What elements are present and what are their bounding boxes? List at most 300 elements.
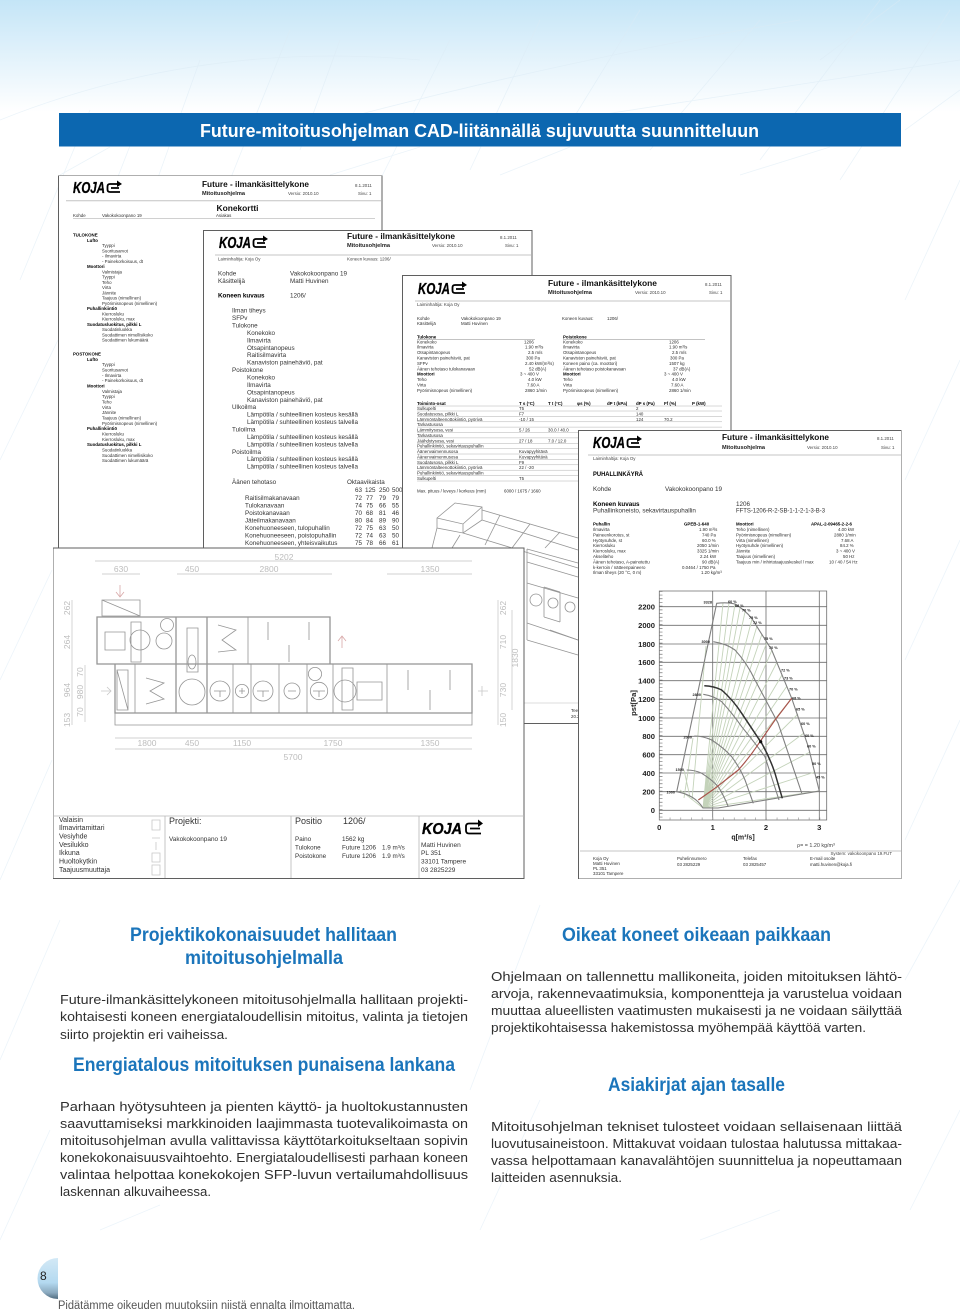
logo: Koja: KOJA — [593, 435, 625, 452]
sound power table: 68 — [366, 510, 374, 517]
motor data: Virta (nimellinen) — [736, 538, 769, 543]
component table: Kuvapyyhitävä — [519, 449, 548, 454]
exhaust unit list: Jännite — [102, 410, 117, 415]
exhaust unit list: Moottori — [87, 384, 105, 388]
sound power table: 66 — [379, 503, 387, 510]
chart efficiency labels: 75 % — [764, 637, 773, 641]
title block position: 1206/ — [343, 816, 366, 826]
exhaust unit list: Suodattimen nimellisikoko — [102, 453, 153, 458]
motor data: Hyötysuhde (nimellinen) — [736, 543, 784, 548]
supply unit data: Tulokone — [417, 334, 437, 339]
sheet header: Mitoitusohjelma — [722, 445, 766, 451]
sheet header: Versio: 2010.10 — [635, 290, 666, 295]
sound power table: Poistokanavaan — [245, 510, 290, 517]
exhaust unit data: 7.60 A — [671, 382, 684, 388]
chart envelope and speed curves — [677, 603, 819, 808]
sound power table: 79 — [379, 495, 387, 502]
component table: F7 — [519, 411, 525, 416]
component table: dP t (kPa) — [607, 401, 628, 406]
motor data: 10 / 40 / 54 Hz — [829, 559, 858, 564]
component table: 7.0 / 12.0 — [548, 438, 567, 443]
title block position: Positio — [295, 816, 322, 826]
sheet header: Vakokokoonpano 19 — [102, 213, 142, 218]
sound power table: 63 — [355, 487, 363, 494]
sheet header: Laiminhaltija: Koja Oy — [417, 302, 460, 307]
chart efficiency labels: 73 % — [784, 676, 793, 680]
supply unit data: SFPv — [417, 361, 429, 366]
CAD dimension labels: 1830 — [510, 648, 520, 667]
project details: Matti Huvinen — [290, 278, 329, 285]
isometric machine sketch: Tee — [571, 708, 579, 713]
component table: 70.2 — [664, 417, 673, 422]
title block project — [169, 816, 228, 843]
supply unit list: Suoritusarvot — [102, 248, 129, 253]
exhaust unit list: Teho — [102, 400, 112, 404]
exhaust unit data: 2.5 m/s — [672, 350, 687, 355]
sheet header: Koneen kuvaus: — [562, 316, 594, 321]
exhaust unit data: Koneen paino (ca. moottori) — [563, 361, 618, 366]
supply unit data: 7.60 A — [527, 382, 540, 388]
machine parameters list: Otsapintanopeus — [247, 389, 295, 396]
component table: 27 / 18 — [519, 438, 533, 443]
supply unit data: 2860 1/min — [525, 388, 547, 393]
component table: Sulkupelti — [417, 406, 436, 411]
logo: Koja — [422, 820, 483, 838]
component table: 124 — [636, 417, 644, 422]
machine parameters list: Lämpötila / suhteellinen kosteus kesällä — [247, 412, 358, 419]
fan data: Äänen tehotaso, A-painotettu — [593, 559, 650, 564]
sheet header: Mitoitusohjelma — [548, 290, 593, 296]
sound power table: 89 — [379, 518, 387, 525]
fan data: GPEB-1-640 — [684, 522, 710, 527]
paragraph — [491, 969, 903, 1035]
sound power table: 70 — [355, 510, 363, 517]
motor data: APAL-2-09465-2-2-6 — [811, 522, 852, 527]
component table: Kuvapyyhitävä — [519, 454, 548, 459]
CAD dimension labels: 1150 — [233, 738, 251, 748]
supply unit list: Kierrosluku, max — [102, 317, 136, 322]
fan data: Ilman tiheys (20 °C, 0 m) — [593, 570, 642, 575]
motor data: 2880 1/min — [834, 532, 856, 537]
sound power table: Tulokanavaan — [245, 503, 285, 510]
text block: right machines in right place — [491, 924, 903, 1035]
title block address: PL 351 — [421, 850, 442, 857]
CAD dimension labels: 262 — [62, 601, 72, 615]
sheet footer: PL 351 — [593, 866, 607, 871]
exhaust unit data: Otsapintanopeus — [563, 350, 597, 355]
sound power table: Raitisilmakanavaan — [245, 495, 300, 502]
panel: fan curve sheet — [578, 430, 902, 879]
CAD dimension lines — [72, 561, 512, 749]
paragraph: laskennan alkuvaiheessa. — [60, 1184, 211, 1199]
supply unit list: Jännite — [102, 290, 117, 295]
component table: Toiminto-osat — [417, 401, 446, 406]
machine parameters list: SFPv — [232, 315, 248, 322]
chart speed labels: 1000 — [667, 790, 675, 794]
logo: Koja: KOJA — [73, 180, 105, 197]
fan data: Kierrosluku, max — [593, 549, 627, 554]
chart efficiency labels: 75 % — [749, 616, 758, 620]
chart efficiency lines — [680, 603, 819, 808]
motor data: 3 ~ 400 V — [836, 549, 855, 554]
chart efficiency labels: 70 % — [789, 688, 798, 692]
paragraph: luovutusaineistoon. Mittakuvat voidaan tulostaa halutussa mittakaa- — [491, 1136, 902, 1151]
chart axis labels: 1800 — [638, 640, 655, 649]
fan data: 1.20 kg/m³ — [701, 570, 722, 575]
motor data: Pyörimisnopeus (nimellinen) — [736, 532, 792, 537]
sheet header — [215, 231, 531, 262]
sound power table: 74 — [355, 503, 363, 510]
paragraph: kohtaisesti koneen energiataloudellisin mitoitus, valinta ja tietojen — [60, 1009, 468, 1024]
exhaust unit list: POSTOKONE — [73, 352, 101, 356]
machine parameters list: Konekoko — [247, 330, 276, 337]
supply unit data: Otsapintanopeus — [417, 350, 451, 355]
exhaust unit data: 1.90 m³/s — [669, 345, 688, 350]
sheet header: Future - ilmankäsittelykone — [722, 432, 829, 442]
paragraph — [491, 1119, 903, 1185]
panel: machine card sheet — [58, 176, 382, 548]
sound power table: Jäteilmakanavaan — [245, 518, 296, 525]
machine parameters list: Lämpötila / suhteellinen kosteus kesällä — [247, 456, 358, 463]
chart axis labels: 600 — [642, 750, 655, 760]
sound power table: 46 — [392, 510, 400, 517]
exhaust unit data: 1507 kg — [669, 361, 685, 366]
supply unit data: 300 Pa — [526, 356, 540, 360]
chart x axis: 2 — [764, 823, 768, 832]
exhaust unit data: Konekoko — [563, 339, 583, 344]
exhaust unit list: Kierrosluku, max — [102, 437, 136, 442]
title block address: Matti Huvinen — [421, 842, 461, 849]
CAD dimension labels: 264 — [62, 635, 72, 649]
title block legend: Valaisin — [59, 817, 83, 824]
CAD dimension labels: 1350 — [421, 738, 440, 748]
fan data: Kierrosluku — [593, 543, 616, 548]
sheet header: Kohde — [417, 316, 430, 321]
sheet header: Sivu: 1 — [505, 243, 519, 248]
exhaust unit data: Pyörimisnopeus (nimellinen) — [563, 388, 619, 393]
sound power table: Oktaavikaista — [347, 479, 385, 486]
text block: energy economy — [60, 1054, 469, 1199]
chart efficiency labels: 60 % — [801, 722, 810, 726]
sheet header: Konekortti — [216, 204, 258, 213]
supply unit list: - Painekorkoisuus, dt — [102, 259, 144, 264]
exhaust unit data: 4.0 kW — [672, 377, 687, 382]
project details: Käsittelijä — [218, 278, 245, 285]
supply unit list: Valmistaja — [102, 269, 122, 274]
sheet header: Mitoitusohjelma — [202, 191, 246, 197]
paragraph — [60, 992, 468, 1042]
fan data: k-kerroin / nätteenpaineero — [593, 565, 646, 570]
chart x axis: 1 — [711, 823, 716, 832]
sheet footer: Matti Huvinen — [593, 861, 620, 866]
chart efficiency labels: 70 % — [742, 608, 751, 612]
chart speed labels: 2800 — [693, 693, 701, 697]
component table: Sulkupelti — [417, 476, 436, 481]
sheet header: Kohde — [73, 213, 86, 218]
exhaust unit list: Virta — [102, 405, 112, 410]
chart efficiency labels: 68 % — [735, 604, 744, 608]
component table: 22 / -20 — [519, 465, 534, 470]
CAD dimension labels: 710 — [498, 635, 508, 649]
isometric machine sketch: 20.2 — [571, 714, 580, 719]
exhaust unit data: 300 Pa — [670, 356, 684, 360]
exhaust unit data: Ilmavirta — [563, 345, 580, 350]
sheet header: 8.1.2011 — [355, 183, 372, 188]
supply unit data: Pyörimisnopeus (nimellinen) — [417, 388, 473, 393]
heading: Oikeat koneet oikeaan paikkaan — [562, 924, 831, 946]
heading — [130, 924, 397, 969]
chart axis labels: 1400 — [638, 676, 655, 686]
chart speed labels — [667, 600, 712, 794]
component table: 30.0 / 40.0 — [548, 428, 569, 432]
sheet header: Mitoitusohjelma — [347, 243, 391, 249]
supply unit list: Pyörimisnopeus (nimellinen) — [102, 301, 158, 306]
sound power table: 90 — [392, 518, 400, 525]
paragraph: Future-ilmankäsittelykoneen mitoitusohjelmalla hallitaan projekti- — [60, 992, 468, 1007]
motor data: 50 Hz — [843, 554, 854, 559]
sound power table: 80 — [355, 518, 363, 525]
motor data — [736, 522, 858, 564]
machine parameters list: Raitisilmavirta — [247, 352, 287, 359]
title block position: 1562 kg — [342, 836, 365, 843]
chart axis labels: 1600 — [638, 658, 655, 667]
fan curve project details: Koneen kuvaus — [593, 501, 640, 508]
sound power table: Konehuoneeseen, tulopuhallin — [245, 525, 330, 532]
component table: 5 / 26 — [519, 428, 531, 432]
sound power table: 250 — [379, 487, 390, 494]
chart efficiency labels: 45 % — [816, 776, 825, 780]
CAD dimension labels: 70 — [75, 667, 85, 677]
paragraph: Ohjelmaan on tallennettu mallikoneita, joiden mitoituksen lähtö- — [491, 969, 902, 984]
supply unit data: 4.0 kW — [528, 377, 543, 382]
logo: Koja: KOJA — [219, 235, 251, 252]
CAD dimension labels: 5202 — [275, 552, 294, 562]
component table: Suodatusosa, pilkki L — [417, 460, 459, 465]
supply unit list: Tyyppi — [102, 275, 115, 280]
CAD air handling unit plan view — [97, 585, 488, 725]
supply unit data: 1206 — [524, 339, 534, 344]
supply unit data: 1.90 m³/s — [525, 345, 544, 350]
footer disclaimer: Pidätämme oikeuden muutoksiin niistä ennalta ilmoittamatta. — [58, 1300, 355, 1312]
supply unit list: Suodatusluokitus, pilkki L — [87, 322, 142, 327]
fan curve project details: Kohde — [593, 486, 612, 493]
sheet header: 1206/ — [607, 316, 619, 321]
machine parameters list: Otsapintanopeus — [247, 345, 295, 352]
exhaust unit list: - Painekorkoisuus, dt — [102, 378, 144, 383]
CAD dimension labels: 2800 — [260, 564, 279, 574]
sound power table: 125 — [365, 487, 376, 494]
paragraph: mitoitusohjelman avulla valittavissa käyttötarkoitukseltaan sopivin — [60, 1133, 468, 1148]
chart efficiency labels: 60 % — [805, 734, 814, 738]
sheet header: Versio: 2010.10 — [288, 191, 319, 196]
fan curve project details: PUHALLINKÄYRÄ — [593, 470, 643, 478]
chart efficiency labels: 50 % — [812, 762, 821, 766]
exhaust unit list: Lufto — [87, 357, 98, 362]
component table: Lämmöntalteenottokiintiö, pyörivä — [417, 417, 483, 422]
heading: Projektikokonaisuudet hallitaan — [130, 924, 397, 946]
exhaust unit list: - Ilmavirta — [102, 373, 122, 378]
paragraph: konekokonaisuusvaihtoehto. Energiataloudellisesti parhaan koneen — [60, 1150, 468, 1165]
chart speed labels: 2000 — [684, 736, 692, 740]
paragraph: Mitoitusohjelman tekniset tulosteet voidaan sellaisenaan liittää — [491, 1119, 903, 1134]
panel: CAD drawing sheet — [53, 548, 524, 878]
project details: Vakokokoonpano 19 — [290, 271, 347, 278]
title block position — [295, 816, 405, 860]
title block legend: Taajuusmuuttaja — [59, 867, 110, 874]
CAD dimension labels: 1750 — [324, 738, 343, 748]
fan data: 90 dB(A) — [702, 559, 720, 564]
supply unit data: Konekoko — [417, 339, 437, 344]
sound power table: Konehuoneeseen, poistopuhallin — [245, 533, 337, 540]
CAD dimension labels: 964 — [62, 683, 72, 697]
exhaust unit list: Suodatinluokka — [102, 447, 133, 452]
sheet header: Vakokokoonpano 19 — [461, 316, 501, 321]
supply unit data — [417, 334, 554, 393]
chart y axis title: pst[Pa] — [629, 690, 638, 716]
sheet footer: Koja Oy — [593, 856, 609, 861]
title block legend symbols — [152, 820, 160, 875]
paragraph: siirto projektin eri vaiheissa. — [60, 1027, 228, 1042]
supply unit data: Teho — [417, 377, 427, 382]
component table: P (kW) — [692, 401, 706, 406]
component table: Tarkastusosa — [417, 433, 443, 438]
component table: 2 — [636, 406, 639, 411]
chart efficiency labels: 72 % — [781, 668, 790, 672]
fan data: Paineenkorotus, st — [593, 532, 630, 537]
machine parameters list: Ilman tiheys — [232, 308, 266, 315]
machine parameters list: Tulokone — [232, 322, 258, 330]
supply unit list: TULOKONE — [73, 233, 98, 238]
chart efficiency labels: 65 % — [796, 708, 805, 712]
title block legend: Vesiyhde — [59, 834, 88, 841]
title block position: Future 1206 — [342, 844, 376, 852]
CAD dimension labels: 730 — [498, 683, 508, 697]
motor data: Teho (nimellinen) — [736, 527, 770, 532]
sheet header: 8.1.2011 — [705, 282, 722, 287]
fan curve project details: Vakokokoonpano 19 — [665, 486, 722, 493]
sound power table: 72 — [355, 495, 363, 502]
component table: φs (%) — [577, 401, 591, 406]
fan data: 60.0 % — [702, 538, 716, 543]
component table: Äänenvaimennusosa — [417, 454, 459, 459]
chart efficiency labels: 70 % — [769, 646, 778, 650]
sound power table: 75 — [366, 525, 374, 532]
logo: Koja: KOJA — [422, 821, 462, 838]
banner heading: Future-mitoitusohjelman CAD-liitännällä sujuvuutta suunnitteluun — [200, 120, 759, 141]
sheet footer: 33101 Tampere — [593, 871, 624, 876]
paragraph: laitteiden asennuksia. — [491, 1170, 622, 1185]
chart axis labels — [638, 602, 655, 815]
exhaust unit list: Tyyppi — [102, 362, 115, 367]
sound power table: 500 — [392, 487, 403, 494]
component table: Ff (%) — [664, 401, 677, 406]
component table: Lämmöntalteenottokiintiö, pyörivä — [417, 465, 483, 470]
panel: technical data sheet — [402, 276, 731, 724]
sound power table: 75 — [366, 503, 374, 510]
sound power table: 77 — [366, 495, 374, 502]
chart axis labels: 1000 — [638, 714, 655, 723]
motor data: 7.68 A — [841, 538, 854, 543]
sheet footer: Telefax — [743, 856, 758, 861]
sound power table: 79 — [392, 495, 400, 502]
supply unit list: Suodattimen lukumäärä — [102, 338, 149, 343]
chart speed labels: 3000 — [702, 640, 710, 644]
supply unit data: Moottori — [417, 372, 435, 377]
component table: Tarkastusosa — [417, 422, 443, 427]
component table: Puhallinkiintiö, sekavirtauspuhallin — [417, 471, 484, 476]
chart axis labels: 200 — [642, 788, 655, 796]
sound power table: 74 — [366, 533, 374, 540]
paragraph: Parhaan hyötysuhteen ja pienten käyttö- ja huoltokustannusten — [60, 1099, 468, 1114]
machine parameters list: Lämpötila / suhteellinen kosteus talvella — [247, 464, 358, 471]
title block position: Poistokone — [295, 853, 327, 860]
sheet header: Versio: 2010.10 — [432, 243, 463, 248]
chart speed labels: 1500 — [676, 768, 684, 772]
machine parameters list: Lämpötila / suhteellinen kosteus talvella — [247, 441, 358, 448]
sheet header: 8.1.2011 — [877, 436, 894, 441]
machine parameters list: Kanaviston painehäviö, pat — [247, 360, 323, 367]
exhaust unit list: Suodattimen lukumäärä — [102, 458, 149, 463]
fan data: 2050 1/min — [697, 543, 719, 548]
supply unit data: Kanaviston painehäviö, pat — [417, 356, 471, 360]
sound power table: Äänen tehotaso — [232, 478, 277, 486]
component table: T t (°C) — [548, 401, 563, 406]
CAD dimension labels: 262 — [498, 601, 508, 615]
exhaust unit data: Teho — [563, 377, 573, 382]
chart x axis: q[m³/s] — [731, 834, 755, 842]
sound power table: 78 — [366, 540, 374, 547]
sound power table: 50 — [392, 533, 400, 540]
chart axis labels: 2000 — [638, 621, 655, 630]
exhaust unit list: Puhallinkiintiö — [87, 426, 117, 431]
supply unit data: 52 dB(A) — [529, 366, 547, 371]
machine parameters list: Konekoko — [247, 374, 276, 382]
sheet header: Matti Huvinen — [461, 321, 488, 326]
machine parameters list: Kanaviston painehäviö, pat — [247, 397, 323, 404]
fan data: 0.0464 / 1750 Pa — [682, 565, 716, 570]
paragraph — [60, 1099, 469, 1199]
supply unit list: Kierrosluku — [102, 311, 125, 316]
motor data: Taajuus (nimellinen) — [736, 554, 776, 559]
exhaust unit list: Kierrosluku — [102, 432, 125, 436]
chart system curve and operating point — [698, 698, 792, 800]
supply unit list: Teho — [102, 280, 112, 285]
supply unit list: Taajuus (nimellinen) — [102, 296, 142, 301]
supply unit data: Ilmavirta — [417, 345, 434, 350]
motor data: 4.00 kW — [838, 527, 855, 532]
sound power table: 63 — [379, 533, 387, 540]
chart axis labels: 400 — [642, 769, 655, 778]
chart speed labels: 3328 — [704, 600, 712, 604]
paragraph: arvoja, rakennevaatimuksia, komponentteja ja varustelua voidaan — [491, 986, 902, 1001]
sheet footer: matti.huvinen@koja.fi — [810, 862, 852, 867]
machine parameters list: Lämpötila / suhteellinen kosteus kesällä — [247, 434, 358, 441]
fan curve project details — [593, 470, 825, 514]
sheet header: Laiminhaltija: Koja Oy — [593, 456, 636, 461]
sheet header: Laiminhaltija: Koja Oy — [218, 257, 261, 262]
sheet header — [415, 278, 730, 326]
machine parameters list: Ulkoilma — [232, 404, 257, 411]
chart axis labels: 1200 — [638, 695, 655, 704]
sheet footer — [580, 851, 901, 876]
title block position: Future 1206 — [342, 853, 376, 860]
title block project: Vakokokoonpano 19 — [169, 837, 228, 843]
paragraph: saavuttamiseksi markkinoiden laajimmasta tuotevalikoimasta on — [60, 1116, 468, 1131]
title block legend: Ilmavirtamittari — [59, 825, 105, 832]
isometric machine sketch — [402, 503, 580, 719]
sound power table: 55 — [392, 503, 400, 510]
project details — [218, 271, 347, 300]
